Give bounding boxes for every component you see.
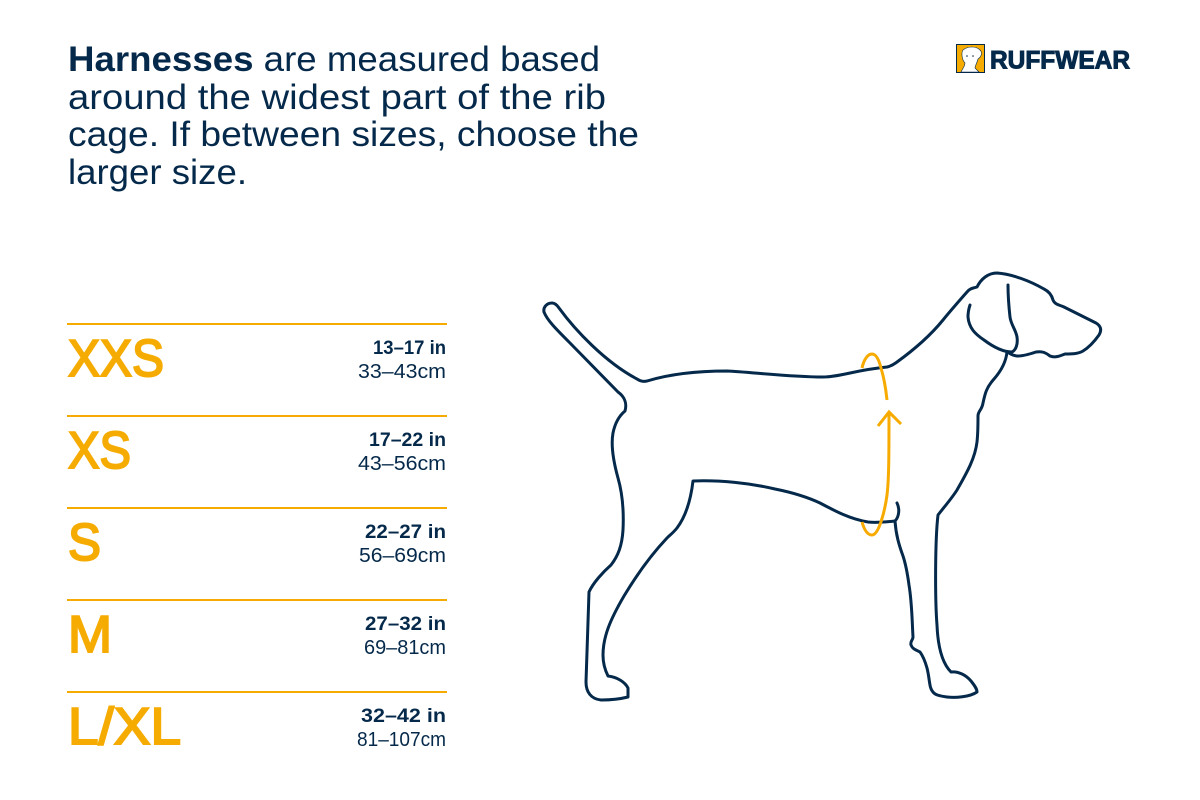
size row: XXS: XXS xyxy=(68,330,164,388)
size row: L/XL: 81–107cm xyxy=(357,729,446,751)
size row: M: 27–32 in xyxy=(365,614,446,635)
size row: XS xyxy=(67,415,447,480)
logo: Ruffwear: RUFFWEAR xyxy=(990,46,1130,74)
heading: larger size. xyxy=(68,153,247,192)
size row: L/XL: 32–42 in xyxy=(361,706,446,727)
heading: cage. If between sizes, choose the xyxy=(68,115,639,154)
size row: L/XL: L/XL xyxy=(68,698,181,756)
size row: XS: 17–22 in xyxy=(369,430,446,451)
heading xyxy=(68,40,639,192)
dog chest notch xyxy=(895,503,899,521)
arrowhead xyxy=(878,412,901,426)
size row: M xyxy=(67,599,447,664)
size row: S xyxy=(67,507,447,572)
size row: XXS: 33–43cm xyxy=(358,361,446,383)
size row: XXS: 13–17 in xyxy=(373,338,446,359)
size row: S: S xyxy=(68,514,101,572)
size row: L/XL xyxy=(67,691,447,756)
heading: around the widest part of the rib xyxy=(68,78,606,117)
size row: XS: 43–56cm xyxy=(358,453,446,475)
size row: XS: XS xyxy=(68,422,131,480)
size row: S: 56–69cm xyxy=(359,545,446,567)
size row: M: M xyxy=(68,606,112,664)
dog outline illustration xyxy=(544,273,1101,700)
size row: S: 22–27 in xyxy=(365,522,446,543)
dog ear xyxy=(968,285,1017,352)
heading: Harnesses are measured based xyxy=(68,40,600,79)
girth measuring loop with arrow xyxy=(862,354,901,535)
size row: XXS xyxy=(67,323,447,388)
size row: M: 69–81cm xyxy=(364,637,446,659)
